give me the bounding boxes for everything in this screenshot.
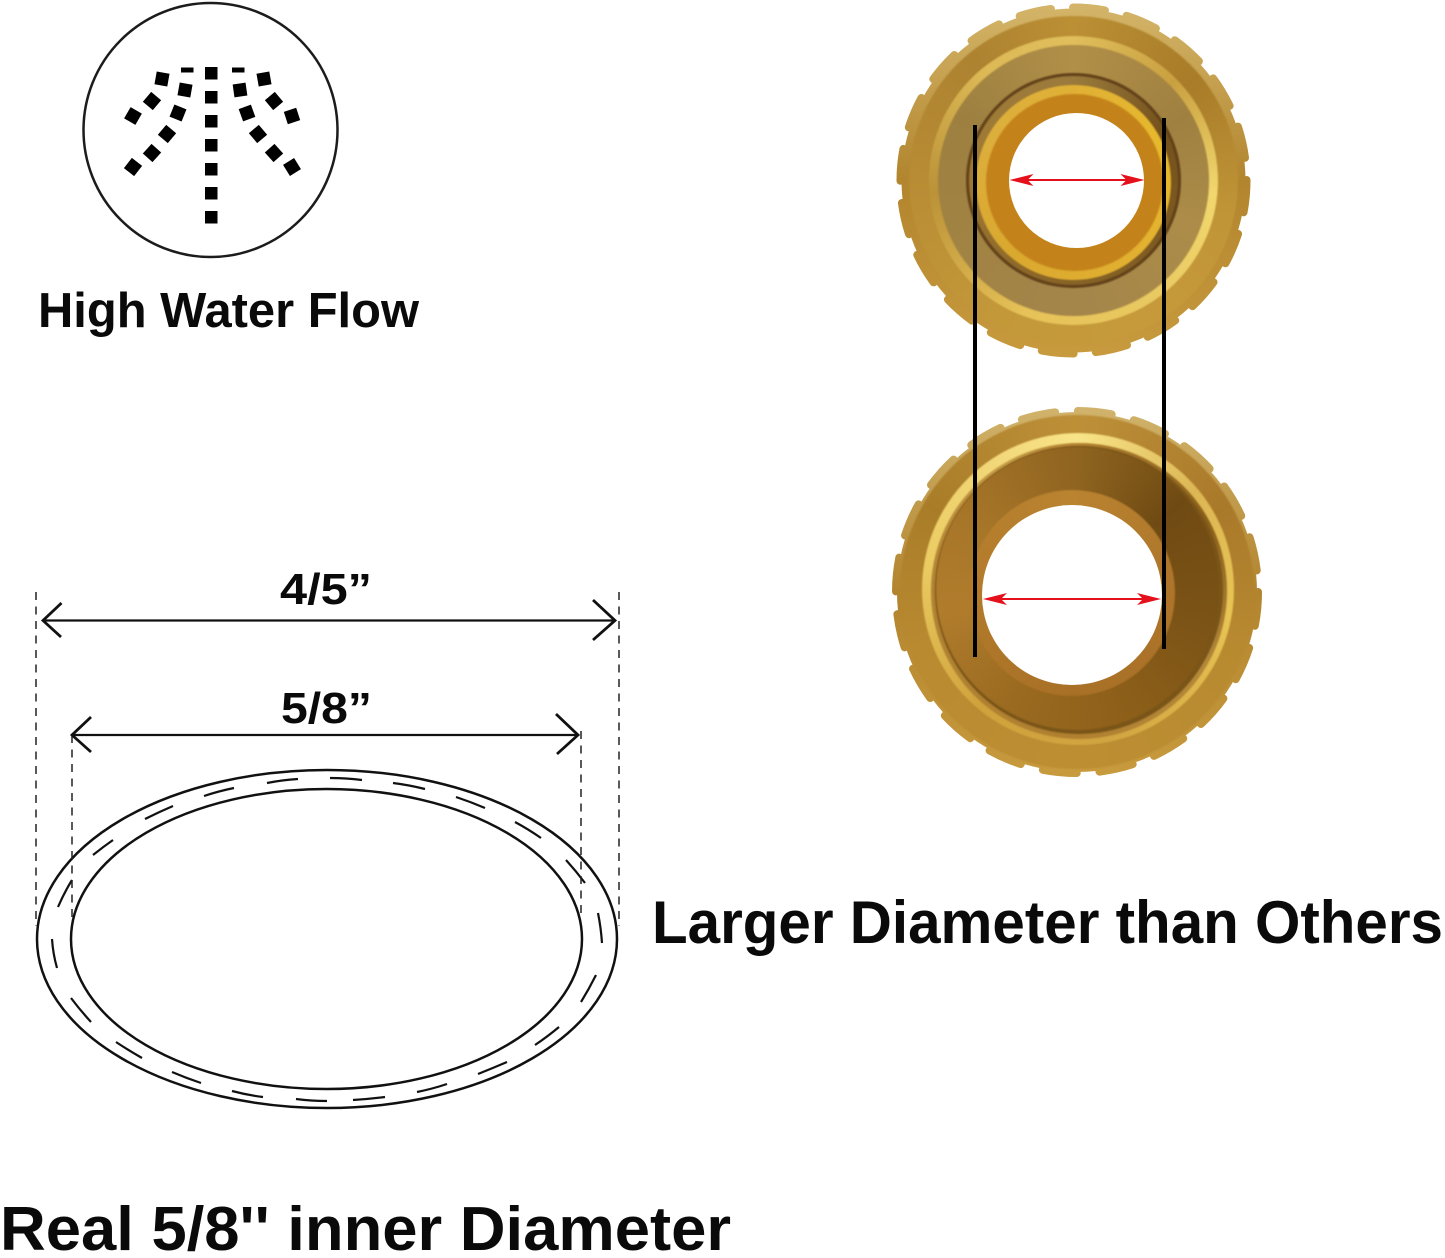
comparison guide lines [975, 118, 1164, 657]
heading: larger diameter than others: Larger Diameter than Others [652, 889, 1443, 956]
dimension arrow: outer 4/5 inch [43, 600, 615, 640]
arrow: bottom bore diameter [983, 593, 1161, 605]
label: 4/5 inch: 4/5” [280, 565, 372, 614]
photo: bottom brass fitting with larger bore [892, 407, 1262, 777]
photo: top brass fitting with smaller bore [896, 4, 1250, 358]
arrow: top bore diameter [1010, 174, 1144, 186]
label: 5/8 inch: 5/8” [281, 684, 372, 733]
dimension extension lines [36, 592, 619, 926]
icon: high water flow spray [84, 3, 338, 257]
heading: high water flow: High Water Flow [38, 284, 420, 338]
dimension arrow: inner 5/8 inch [72, 714, 578, 754]
hose cross-section ellipses [37, 770, 617, 1108]
